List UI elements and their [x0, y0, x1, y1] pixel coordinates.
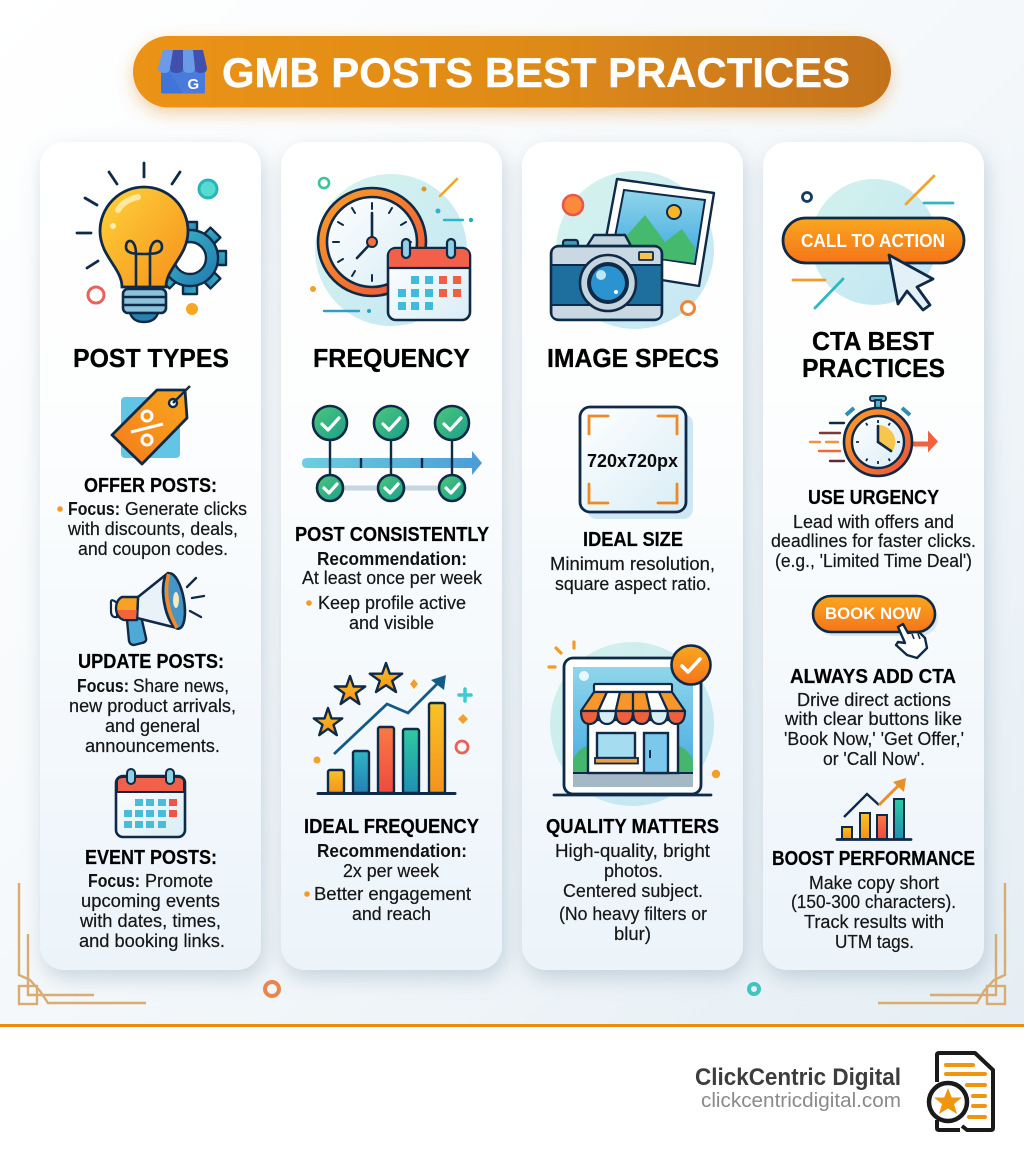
text block: always add cta: 'Book Now,' 'Get Offer,': [784, 729, 964, 749]
text block: use urgency: USE URGENCY: [808, 487, 940, 509]
text block: post consistently: At least once per week: [302, 568, 483, 588]
text block: quality matters: High-quality, bright: [555, 841, 710, 861]
text block: offer posts: Generate clicks: [125, 499, 247, 519]
text block: offer posts: OFFER POSTS:: [84, 475, 217, 497]
icon: price tag: [112, 386, 190, 464]
text block: update posts: [69, 651, 236, 756]
text block: ideal size: IDEAL SIZE: [583, 529, 683, 551]
icon: storefront photo with check badge: [549, 642, 720, 806]
icon: small growth chart: [837, 778, 911, 840]
text block: quality matters: (No heavy filters or: [559, 904, 707, 924]
text block: boost performance: BOOST PERFORMANCE: [772, 848, 975, 870]
panel: cta best practices: [763, 142, 984, 970]
text block: post consistently: Keep profile active: [318, 593, 466, 613]
text block: ideal frequency: 2x per week: [343, 861, 440, 881]
text block: quality matters: QUALITY MATTERS: [546, 816, 719, 838]
text block: event posts: and booking links.: [79, 931, 225, 951]
footer brand text: clickcentricdigital.com: [701, 1090, 901, 1112]
decorative corner ornament: bottom left: [19, 883, 146, 1004]
text block: quality matters: [546, 816, 719, 944]
panel: image specs: [522, 142, 743, 970]
text block: always add cta: with clear buttons like: [784, 709, 962, 729]
icon: event calendar: [116, 769, 185, 837]
icon: megaphone: [111, 572, 204, 645]
text block: ideal frequency: IDEAL FREQUENCY: [304, 816, 480, 838]
footer white band: [0, 1027, 1024, 1154]
text block: update posts: announcements.: [85, 736, 220, 756]
panel: post types: [40, 142, 261, 970]
text block: use urgency: [771, 487, 976, 571]
text block: boost performance: UTM tags.: [835, 932, 914, 952]
chart: bars with rising arrow and stars: [314, 663, 471, 794]
text block: update posts: UPDATE POSTS:: [78, 651, 224, 673]
text block: quality matters: photos.: [604, 861, 663, 881]
decorative corner ornament: bottom right: [878, 883, 1005, 1004]
text block: use urgency: deadlines for faster clicks.: [771, 531, 976, 551]
footer brand text: ClickCentric Digital: [695, 1064, 901, 1091]
text block: ideal size: square aspect ratio.: [555, 574, 711, 594]
text block: boost performance: [772, 848, 975, 952]
text block: offer posts: and coupon codes.: [78, 539, 228, 559]
text block: update posts: new product arrivals,: [69, 696, 236, 716]
text block: use urgency: (e.g., 'Limited Time Deal'): [775, 551, 972, 571]
text block: quality matters: Centered subject.: [563, 881, 703, 901]
icon: timeline with check marks: [302, 406, 482, 501]
icon: book now button with hand: [813, 596, 938, 658]
text block: update posts: and general: [105, 716, 200, 736]
heading: cta best practices: CTA BEST: [812, 326, 934, 356]
text block: post consistently: Recommendation:: [317, 549, 467, 569]
text block: ideal frequency: Recommendation:: [317, 841, 467, 861]
text block: use urgency: Lead with offers and: [793, 512, 954, 532]
footer brand text: [695, 1064, 901, 1112]
panel: frequency: [281, 142, 502, 970]
text block: always add cta: [784, 666, 964, 769]
text block: ideal frequency: Better engagement: [314, 884, 471, 904]
text block: event posts: EVENT POSTS:: [85, 847, 217, 869]
text block: boost performance: (150-300 characters).: [791, 892, 956, 912]
text block: event posts: [79, 847, 225, 951]
icon: book now button with hand: BOOK NOW: [825, 604, 922, 623]
icon: 720x720 frame: 720x720px: [587, 451, 678, 471]
heading: post types: POST TYPES: [73, 343, 229, 373]
title text: GMB POSTS BEST PRACTICES: [222, 49, 850, 96]
icon: Google My Business store: G: [188, 76, 199, 93]
text block: offer posts: with discounts, deals,: [67, 519, 238, 539]
text block: post consistently: and visible: [349, 613, 434, 633]
text block: ideal frequency: and reach: [352, 904, 431, 924]
text block: post consistently: POST CONSISTENTLY: [295, 524, 490, 546]
decorative ring: orange: [265, 982, 279, 996]
text block: offer posts: [57, 475, 247, 559]
icon: camera and photo: [551, 171, 714, 329]
text block: always add cta: Drive direct actions: [797, 690, 951, 710]
text block: post consistently: [295, 524, 490, 633]
text block: always add cta: ALWAYS ADD CTA: [790, 666, 956, 688]
text block: update posts: Focus:: [77, 676, 129, 696]
text block: quality matters: blur): [614, 924, 651, 944]
heading: image specs: IMAGE SPECS: [547, 343, 719, 373]
text block: ideal size: [550, 529, 715, 594]
icon: call to action button with cursor: [783, 176, 964, 310]
text block: event posts: Promote: [145, 871, 213, 891]
text block: offer posts: Focus:: [68, 499, 120, 519]
text block: boost performance: Make copy short: [809, 873, 939, 893]
decorative ring: teal: [749, 984, 759, 994]
text block: always add cta: or 'Call Now'.: [823, 749, 925, 769]
text block: ideal frequency: [304, 816, 480, 924]
heading: frequency: FREQUENCY: [313, 343, 470, 373]
text block: boost performance: Track results with: [804, 912, 944, 932]
footer logo: document with star seal: [929, 1053, 993, 1130]
icon: 720x720 frame: [580, 407, 693, 519]
text block: event posts: with dates, times,: [79, 911, 221, 931]
icon: light bulb and gear: [77, 163, 226, 322]
text block: event posts: upcoming events: [81, 891, 220, 911]
heading: cta best practices: PRACTICES: [802, 353, 945, 383]
title banner: [133, 36, 891, 108]
text block: ideal size: Minimum resolution,: [550, 554, 715, 574]
icon: stopwatch: [810, 396, 938, 476]
text block: event posts: Focus:: [88, 871, 140, 891]
icon: call to action button with cursor: CALL TO ACTION: [801, 231, 945, 251]
icon: Google My Business store: [158, 50, 207, 94]
heading: cta best practices: [802, 326, 945, 383]
text block: update posts: Share news,: [133, 676, 229, 696]
footer orange divider: [0, 1024, 1024, 1027]
icon: clock and calendar: [310, 174, 473, 326]
